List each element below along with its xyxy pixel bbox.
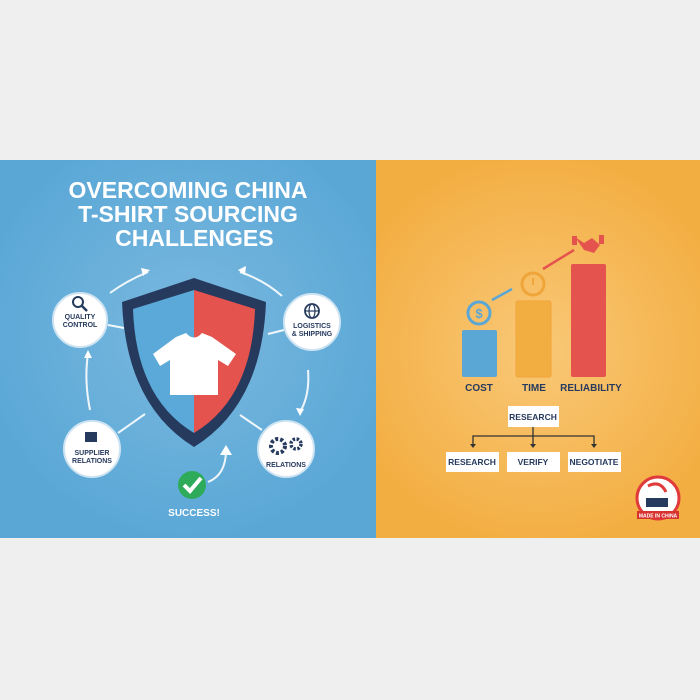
icon: clock (522, 273, 544, 295)
icon: supplier relations: SUPPLIER (74, 450, 110, 457)
icon: made in china badge (637, 477, 679, 520)
chart: cost time reliability: RELIABILITY (560, 383, 622, 394)
icon: t-shirt (153, 333, 236, 395)
chart: cost time reliability: TIME (522, 383, 546, 394)
title: CHALLENGES (115, 225, 274, 251)
icon: logistics: LOGISTICS (293, 323, 331, 330)
flowchart: RESEARCH (448, 457, 496, 467)
panel: left blue (0, 160, 376, 538)
panel: right orange (376, 160, 700, 538)
icon: handshake (572, 235, 604, 253)
icon: logistics (284, 294, 340, 350)
icon: relations gears (258, 421, 314, 477)
icon: dollar: $ (475, 306, 483, 321)
icon: shield (122, 278, 266, 447)
icon: relations gears: RELATIONS (266, 462, 306, 469)
icon: made in china badge: MADE IN CHINA (639, 514, 678, 520)
flowchart (446, 406, 621, 472)
icon: quality control: CONTROL (63, 322, 98, 329)
label: success: SUCCESS! (168, 508, 220, 519)
title (69, 177, 307, 251)
icon: logistics: & SHIPPING (292, 331, 333, 338)
flowchart: VERIFY (518, 457, 549, 467)
chart: cost time reliability (446, 235, 680, 520)
flowchart: RESEARCH (509, 412, 557, 422)
icon: success check (178, 471, 206, 499)
diagram: shield cycle (52, 266, 341, 519)
title: T-SHIRT SOURCING (78, 201, 298, 227)
icon: supplier relations: RELATIONS (72, 458, 112, 465)
chart: cost time reliability: COST (465, 383, 493, 394)
icon: dollar (468, 302, 490, 324)
title: OVERCOMING CHINA (69, 177, 307, 203)
icon: supplier relations (64, 421, 120, 477)
icon: quality control: QUALITY (65, 314, 96, 321)
icon: quality control (53, 293, 107, 347)
flowchart: NEGOTIATE (570, 457, 619, 467)
